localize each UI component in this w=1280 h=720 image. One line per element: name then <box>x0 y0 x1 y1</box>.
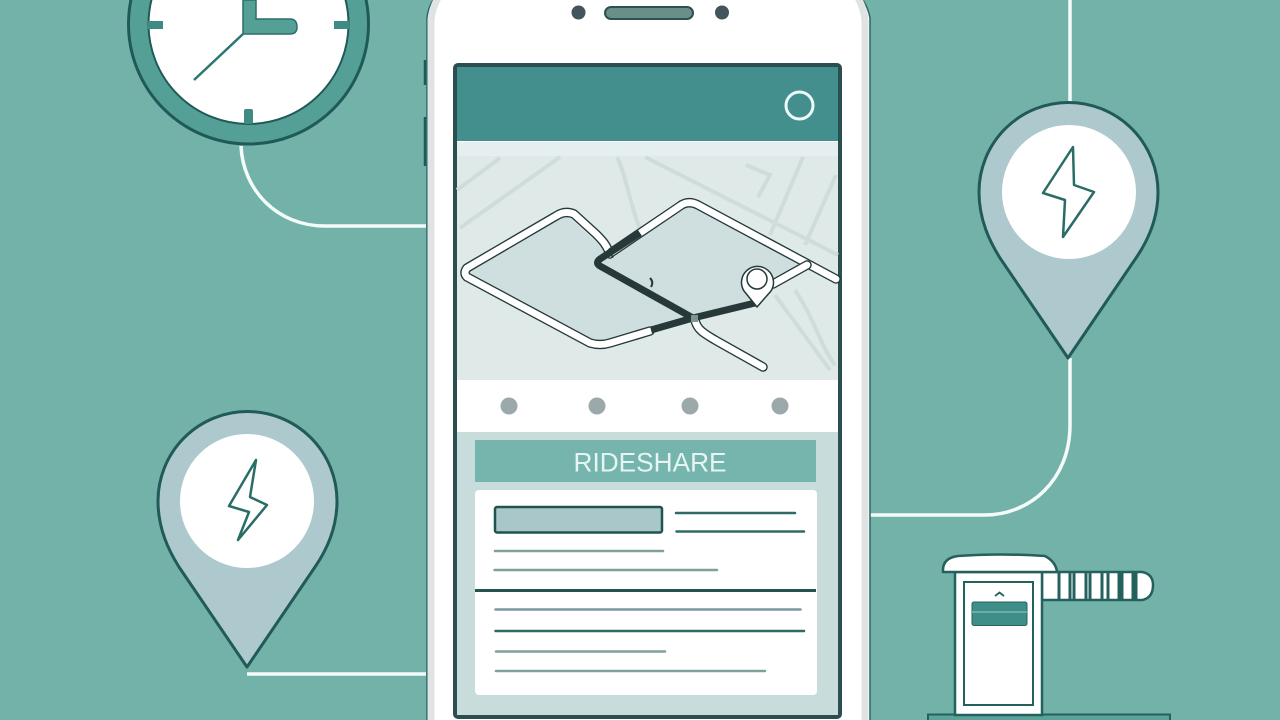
barrier cap <box>943 554 1057 572</box>
phone side buttons <box>424 60 426 166</box>
route junction <box>691 315 698 322</box>
phone <box>425 0 870 720</box>
barrier arm <box>1042 572 1153 600</box>
barrier door <box>964 582 1033 705</box>
comma mark <box>650 278 652 287</box>
camera dot right <box>715 6 729 20</box>
phone bezel edges <box>431 0 865 720</box>
map route blocks <box>465 213 693 343</box>
app header bar <box>457 67 838 141</box>
active route <box>598 233 755 330</box>
white roads <box>465 203 836 367</box>
icon: location pin left <box>158 412 337 667</box>
icon: parking barrier <box>928 554 1170 720</box>
map panel <box>457 142 838 380</box>
lower panel <box>457 432 838 715</box>
icon: map pin <box>742 266 773 307</box>
heading: rideshare: RIDESHARE <box>574 448 726 478</box>
card thumbnail <box>495 507 662 532</box>
icon: header circle <box>786 92 813 119</box>
icon: clock <box>128 0 368 144</box>
camera dot left <box>572 6 586 20</box>
map background streets <box>457 157 838 370</box>
screen <box>455 65 840 717</box>
barrier caret <box>995 592 1004 596</box>
info card <box>475 490 817 695</box>
title band <box>475 440 816 482</box>
icon: location pin right <box>979 102 1158 358</box>
barrier slot <box>972 602 1027 626</box>
pagination dots <box>500 398 788 414</box>
speaker <box>605 7 693 19</box>
card text lines <box>475 513 816 671</box>
connector lines <box>241 0 1070 674</box>
barrier body <box>955 572 1042 715</box>
barrier base <box>928 714 1170 720</box>
phone body <box>427 0 870 720</box>
